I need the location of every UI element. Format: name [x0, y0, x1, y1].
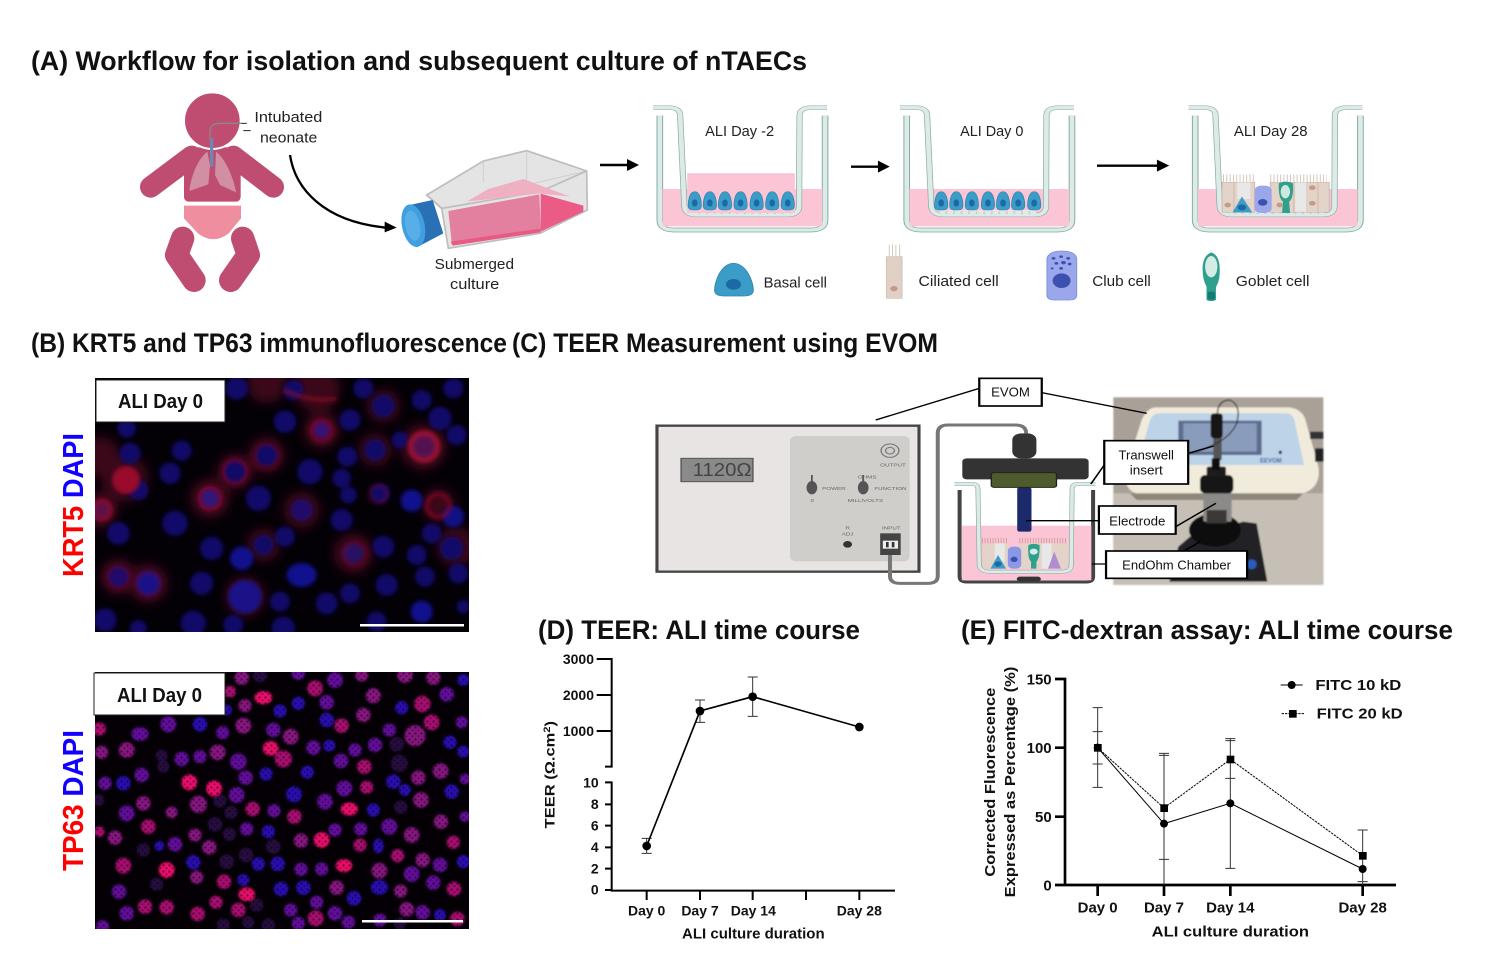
- label: intubated neonate: neonate: [260, 130, 317, 146]
- y axis title: [983, 666, 1019, 897]
- y tick labels: 8: [591, 796, 599, 812]
- label: Transwell insert: Transwell: [1119, 448, 1174, 463]
- legend: club cell: [1047, 251, 1151, 300]
- transwell: ALI Day 28 with differentiated cells: ALI Day 28: [1234, 123, 1308, 139]
- label: intubated neonate: Intubated: [254, 110, 322, 126]
- heading: panel E: (E) FITC-dextran assay: ALI time course: [961, 615, 1453, 645]
- y axis title: ): [542, 721, 558, 727]
- y tick labels: 2: [591, 860, 599, 876]
- x tick labels: [628, 902, 882, 918]
- label: Transwell insert: [1104, 441, 1188, 484]
- data line and points: [642, 692, 864, 850]
- device: EVOM meter front panel: R: [845, 526, 850, 531]
- axis label: TP63 DAPI: TP63 DAPI: [58, 730, 90, 871]
- legend: basal cell: Basal cell: [764, 275, 827, 291]
- legend: FITC 10 kD: [1315, 678, 1401, 694]
- transwell: ALI Day 28 with differentiated cells: [1189, 108, 1362, 230]
- panel: transwell time series and cell legend: [653, 108, 1362, 301]
- scale bar: KRT5: [360, 624, 464, 626]
- arrow: ALI Day 0 to ALI Day 28: [1097, 160, 1169, 172]
- diagram: electrode in transwell insert and EndOhm chamber: [955, 433, 1095, 582]
- y tick labels: 150: [1027, 671, 1052, 688]
- label: submerged culture: culture: [450, 277, 499, 293]
- scale bar: TP63: [362, 920, 463, 922]
- icon: neonate with lungs: [151, 92, 273, 280]
- transwell: ALI Day 0: [900, 108, 1074, 230]
- series: FITC 20 kD: [1094, 744, 1367, 860]
- label: ALI Day 0 (TP63): ALI Day 0: [117, 684, 202, 707]
- device: EVOM meter front panel: ADJ: [842, 532, 854, 537]
- y tick labels: 6: [591, 817, 599, 833]
- y tick labels: 3000: [563, 651, 594, 667]
- series: FITC 10 kD: [1094, 744, 1367, 873]
- legend: goblet cell: Goblet cell: [1236, 273, 1309, 289]
- label: EndOhm Chamber: EndOhm Chamber: [1122, 558, 1231, 573]
- y axis title: Corrected Fluorescence: [983, 688, 999, 877]
- axes with broken y axis: [597, 659, 895, 900]
- legend: basal cell: [715, 263, 827, 296]
- chart: TEER time course: [542, 651, 895, 942]
- device: EVOM meter front panel: OUTPUT: [880, 463, 907, 468]
- legend: ciliated cell: Ciliated cell: [919, 273, 999, 289]
- transwell: ALI Day 0: ALI Day 0: [960, 123, 1023, 139]
- arrow: ALI Day -2 to ALI Day 0: [851, 161, 890, 173]
- x axis title: ALI culture duration: [682, 926, 825, 942]
- icon: culture flask: [398, 151, 587, 249]
- panel: intubated neonate to submerged culture: [151, 92, 587, 293]
- label: intubated neonate: [254, 110, 322, 146]
- device: EVOM meter front panel: 1120Ω: [693, 459, 752, 480]
- cable: meter to electrode: [890, 425, 1026, 583]
- y tick labels: 1000: [563, 723, 594, 739]
- device: EVOM meter front panel: FUNCTION: [874, 487, 907, 492]
- y tick labels: 50: [1035, 809, 1052, 826]
- label: EVOM: [979, 378, 1042, 406]
- axis label: KRT5 DAPI: KRT5 DAPI: [58, 433, 90, 577]
- x tick labels: Day 28: [837, 902, 882, 918]
- heading: panel C: (C) TEER Measurement using EVOM: [512, 328, 938, 358]
- label: ALI Day 0 (TP63): [94, 673, 225, 715]
- y axis title: Expressed as Percentage (%): [1003, 666, 1019, 897]
- x tick labels: [1078, 900, 1387, 917]
- transwell: ALI Day -2: ALI Day -2: [705, 123, 774, 139]
- transwell: ALI Day -2: [653, 108, 827, 230]
- x tick labels: Day 7: [1144, 900, 1184, 917]
- legend: club cell: Club cell: [1092, 273, 1151, 289]
- arrow: neonate to flask: [290, 155, 397, 232]
- error bars: [1093, 708, 1368, 885]
- y tick labels: [563, 651, 599, 898]
- label: ALI Day 0 (KRT5): ALI Day 0: [118, 390, 203, 413]
- legend: [1281, 678, 1403, 723]
- arrow: flask to ALI Day -2: [600, 159, 639, 171]
- label: Transwell insert: insert: [1130, 464, 1163, 478]
- y tick labels: 0: [591, 882, 599, 898]
- y tick labels: 10: [583, 774, 599, 790]
- title: panel A heading: (A) Workflow for isolation and subsequent culture of nTAECs: [31, 46, 807, 76]
- device: EVOM meter front panel: OHMS: [858, 475, 877, 480]
- label: submerged culture: Submerged: [435, 257, 514, 273]
- leader lines: [876, 388, 1216, 564]
- legend: goblet cell: [1203, 252, 1309, 301]
- device: EVOM meter front panel: 0: [811, 499, 814, 504]
- x tick labels: Day 14: [1206, 900, 1255, 917]
- y tick labels: 0: [1043, 877, 1052, 894]
- micrograph: TP63 DAPI immunofluorescence: [92, 667, 470, 933]
- x tick labels: Day 0: [628, 902, 666, 918]
- micrograph: KRT5 DAPI immunofluorescence: [80, 363, 477, 640]
- label: Electrode: Electrode: [1109, 514, 1166, 529]
- y tick labels: 100: [1027, 740, 1052, 757]
- legend: FITC 20 kD: [1317, 707, 1403, 723]
- chart: FITC-dextran time course: [983, 666, 1403, 941]
- label: submerged culture: [435, 257, 514, 293]
- heading: panel B: (B) KRT5 and TP63 immunofluorescence: [31, 328, 507, 358]
- label: EVOM: EVOM: [991, 386, 1030, 400]
- photo: EVOM device and EndOhm chamber: [1113, 397, 1323, 585]
- device: EVOM meter front panel: [657, 426, 919, 572]
- label: ALI Day 0 (KRT5): [96, 380, 225, 422]
- label: EndOhm Chamber: [1106, 551, 1247, 578]
- device: EVOM meter front panel: MILLIVOLTS: [848, 499, 884, 504]
- x axis title: ALI culture duration: [1152, 924, 1309, 941]
- y tick labels: 2000: [563, 687, 594, 703]
- legend: ciliated cell: [886, 244, 999, 298]
- x tick labels: Day 7: [681, 902, 719, 918]
- x tick labels: Day 0: [1078, 900, 1118, 917]
- error bars: [642, 677, 758, 853]
- axes: [1055, 679, 1396, 896]
- y axis title: 2: [542, 727, 552, 733]
- x tick labels: Day 28: [1338, 900, 1387, 917]
- label: Electrode: [1099, 506, 1176, 534]
- photo: EVOM device and EndOhm chamber: EEVOM: [1260, 459, 1282, 465]
- device: EVOM meter front panel: INPUT: [882, 526, 901, 531]
- y tick labels: [1027, 671, 1052, 894]
- panel: EVOM TEER measurement set-up: [657, 378, 1247, 583]
- device: EVOM meter front panel: POWER: [822, 487, 846, 492]
- heading: panel D: (D) TEER: ALI time course: [538, 615, 860, 645]
- y tick labels: 4: [591, 839, 599, 855]
- y axis title: TEER (Ω.cm: [542, 747, 558, 828]
- x tick labels: Day 14: [731, 902, 776, 918]
